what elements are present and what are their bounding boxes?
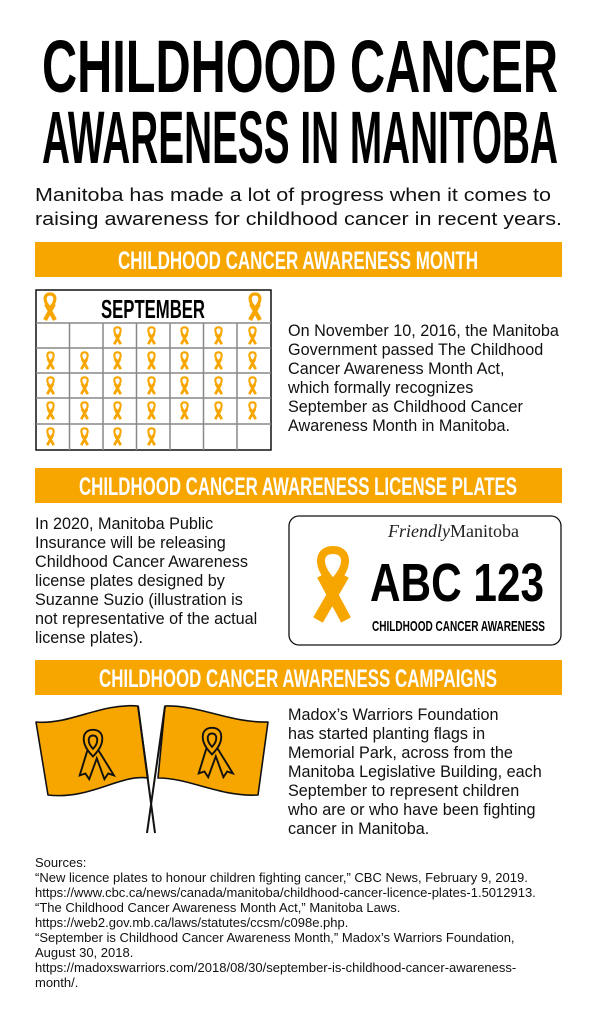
- text: campaigns: [287, 706, 542, 838]
- text: license plates: Childhood Cancer Awareness: [35, 553, 248, 571]
- text: campaigns: Manitoba Legislative Building, each: [288, 763, 542, 781]
- calendar: [36, 290, 271, 450]
- icon: crossed flags: [36, 706, 268, 833]
- text: month act: Government passed The Childhood: [288, 341, 543, 359]
- license plate: Friendly: [387, 521, 450, 541]
- text: license plates: Suzanne Suzio (illustration is: [35, 591, 243, 609]
- text: license plates: Insurance will be releasing: [35, 534, 226, 552]
- text: month act: [287, 322, 559, 435]
- heading: campaigns: [35, 660, 562, 695]
- sources: month/.: [35, 975, 78, 990]
- text: month act: Awareness Month in Manitoba.: [288, 417, 510, 435]
- text: campaigns: September to represent children: [288, 782, 519, 800]
- sources: “New licence plates to honour children fighting cancer,” CBC News, February 9, 2019.: [35, 870, 528, 885]
- intro text: Manitoba has made a lot of progress when it comes to: [35, 184, 551, 205]
- text: month act: Cancer Awareness Month Act,: [288, 360, 505, 378]
- text: month act: which formally recognizes: [287, 379, 473, 397]
- text: license plates: not representative of the actual: [35, 610, 257, 628]
- text: campaigns: who are or who have been fighting: [287, 801, 535, 819]
- intro text: raising awareness for childhood cancer in recent years.: [35, 208, 562, 229]
- license plate: [289, 516, 561, 645]
- text: month act: September as Childhood Cancer: [288, 398, 523, 416]
- intro text: [35, 184, 562, 229]
- heading: awareness month: [35, 242, 562, 277]
- sources: https://www.cbc.ca/news/canada/manitoba/childhood-cancer-licence-plates-1.5012913.: [35, 885, 536, 900]
- text: license plates: [35, 515, 257, 647]
- text: campaigns: cancer in Manitoba.: [288, 820, 429, 838]
- sources: https://web2.gov.mb.ca/laws/statutes/ccsm/c098e.php.: [35, 915, 348, 930]
- license plate: Manitoba: [450, 521, 519, 541]
- text: campaigns: Memorial Park, across from the: [288, 744, 513, 762]
- text: campaigns: has started planting flags in: [288, 725, 485, 743]
- sources: Sources:: [35, 855, 86, 870]
- license plate: ABC 123: [370, 553, 544, 613]
- text: license plates: license plates designed by: [35, 572, 226, 590]
- text: campaigns: Madox’s Warriors Foundation: [288, 706, 499, 724]
- sources: “September is Childhood Cancer Awareness Month,” Madox’s Warriors Foundation,: [35, 930, 515, 945]
- text: month act: On November 10, 2016, the Manitoba: [288, 322, 559, 340]
- calendar: SEPTEMBER: [101, 294, 205, 324]
- sources: [35, 855, 536, 990]
- sources: https://madoxswarriors.com/2018/08/30/september-is-childhood-cancer-awareness-: [35, 960, 516, 975]
- sources: “The Childhood Cancer Awareness Month Act,” Manitoba Laws.: [35, 900, 400, 915]
- title: [42, 25, 558, 179]
- text: license plates: license plates).: [35, 629, 143, 647]
- heading: license plates: [35, 468, 562, 503]
- text: license plates: In 2020, Manitoba Public: [35, 515, 213, 533]
- sources: August 30, 2018.: [35, 945, 133, 960]
